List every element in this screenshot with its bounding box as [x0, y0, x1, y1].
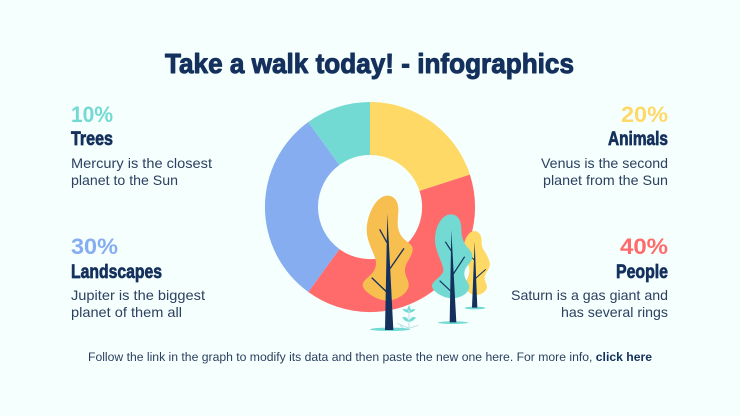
segment: landscapes 30%	[265, 122, 339, 292]
percentage: 30%: 30%	[71, 234, 118, 259]
panel: trees 10%	[71, 102, 212, 188]
icon: small plant	[397, 305, 418, 328]
text: People description: Saturn is a gas giant and	[511, 287, 668, 303]
footer note: Follow the link in the graph to modify its data and then paste the new one here. For more info, click here	[88, 350, 652, 364]
heading: Animals: Animals	[608, 129, 668, 150]
panel: landscapes 30%	[71, 234, 205, 320]
heading: Trees: Trees	[71, 129, 113, 150]
icon: large orange tree	[363, 196, 413, 331]
icon: small yellow tree	[464, 231, 490, 309]
heading: People: People	[616, 262, 668, 283]
title: Take a walk today! - infographics	[165, 48, 574, 79]
text: Landscapes description: Jupiter is the biggest	[71, 287, 205, 303]
percentage: 10%: 10%	[71, 102, 113, 127]
panel: people 40%	[511, 234, 668, 320]
segment: animals 20%	[370, 102, 470, 191]
text: Trees description: planet to the Sun	[71, 172, 178, 188]
percentage: 20%: 20%	[621, 102, 668, 127]
segment: people 40%	[308, 175, 475, 312]
text: Animals description: planet from the Sun	[543, 172, 668, 188]
text: Trees description: Mercury is the closest	[71, 155, 212, 171]
text: Landscapes description: planet of them all	[71, 304, 182, 320]
panel: animals 20%	[541, 102, 668, 188]
icon: teal tree	[432, 214, 472, 324]
heading: Landscapes: Landscapes	[71, 262, 162, 283]
donut chart	[265, 102, 475, 312]
percentage: 40%: 40%	[620, 234, 668, 259]
text: People description: has several rings	[561, 304, 668, 320]
illustration: trees	[363, 196, 490, 331]
text: Animals description: Venus is the second	[541, 155, 668, 171]
segment: trees 10%	[308, 102, 370, 165]
